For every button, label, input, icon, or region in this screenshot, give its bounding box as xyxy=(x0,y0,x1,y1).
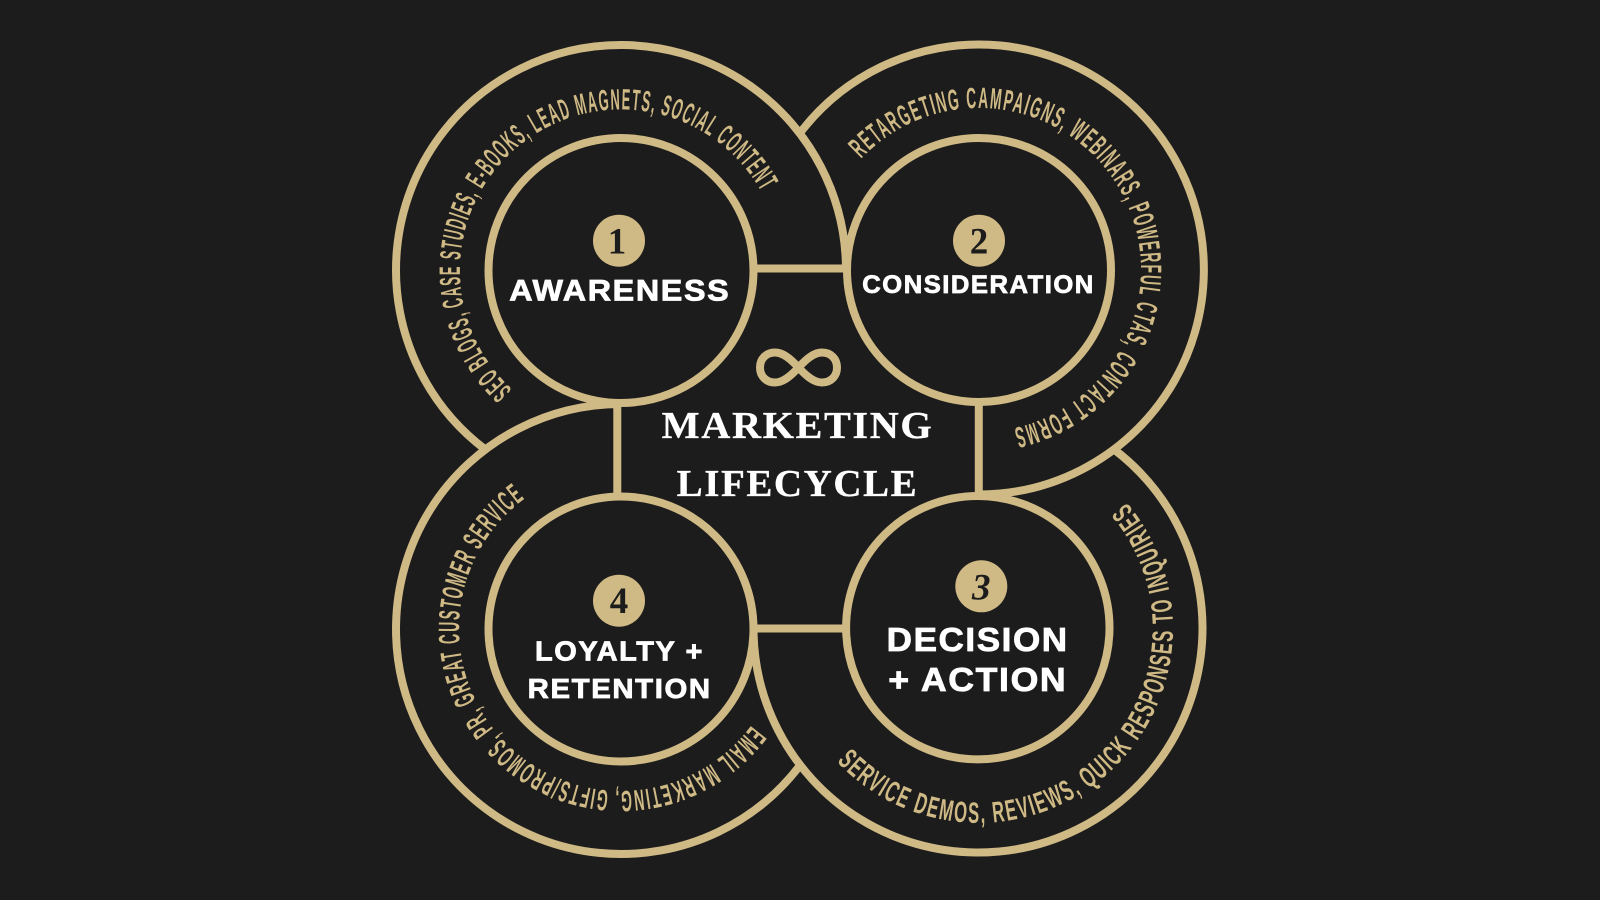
outer arc: stage 4 xyxy=(396,404,800,854)
curved tactics text: stage 1: SEO BLOGS, CASE STUDIES, E-BOOKS, LEAD MAGNETS, SOCIAL CONTENT xyxy=(440,89,779,402)
connectors between stages xyxy=(617,268,979,628)
outer arc: stage 3 xyxy=(754,449,1203,852)
outer arc: stage 2 xyxy=(800,45,1204,494)
label: loyalty + retention: LOYALTY + xyxy=(535,636,704,666)
inner circle: stage 1 xyxy=(488,138,754,403)
label: consideration: CONSIDERATION xyxy=(862,271,1095,299)
curved tactics text: stage 2: RETARGETING CAMPAIGNS, WEBINARS, POWERFUL CTAS, CONTACT FORMS xyxy=(847,88,1162,448)
inner circle: stage 2 xyxy=(847,138,1111,402)
outer arc: stage 1 xyxy=(396,45,846,449)
title: marketing lifecycle: LIFECYCLE xyxy=(677,463,918,505)
number badge 4 xyxy=(593,575,645,627)
label: decision + action xyxy=(887,622,1069,699)
number badge 1 xyxy=(593,215,645,267)
panel: stage 1 awareness xyxy=(392,41,848,450)
number badge 2 xyxy=(953,215,1005,267)
title: marketing lifecycle: MARKETING xyxy=(662,405,933,447)
panel: stage 3 decision and action xyxy=(752,450,1206,856)
label: awareness: AWARENESS xyxy=(509,274,730,308)
number badge 1: 1 xyxy=(608,221,626,262)
label: decision + action: DECISION xyxy=(887,622,1069,659)
number badge 3 xyxy=(955,560,1007,612)
panel: stage 4 loyalty and retention xyxy=(392,402,800,858)
curved tactics text: stage 3: SERVICE DEMOS, REVIEWS, QUICK RESPONSES TO INQUIRIES xyxy=(838,504,1174,828)
number badge 3: 3 xyxy=(971,567,991,608)
panel: stage 2 consideration xyxy=(800,40,1208,496)
label: loyalty + retention: RETENTION xyxy=(528,673,712,704)
label: loyalty + retention xyxy=(528,636,712,704)
icon: infinity xyxy=(760,352,837,382)
number badge 4: 4 xyxy=(610,581,628,622)
inner circle: stage 3 xyxy=(846,496,1110,759)
number badge 2: 2 xyxy=(970,221,988,262)
curved tactics text: stage 4: EMAIL MARKETING, GIFTS/PROMOS, PR, GREAT CUSTOMER SERVICE xyxy=(438,483,767,812)
title: marketing lifecycle xyxy=(662,405,933,505)
inner circle: stage 4 xyxy=(488,496,754,762)
label: decision + action: + ACTION xyxy=(888,662,1067,699)
